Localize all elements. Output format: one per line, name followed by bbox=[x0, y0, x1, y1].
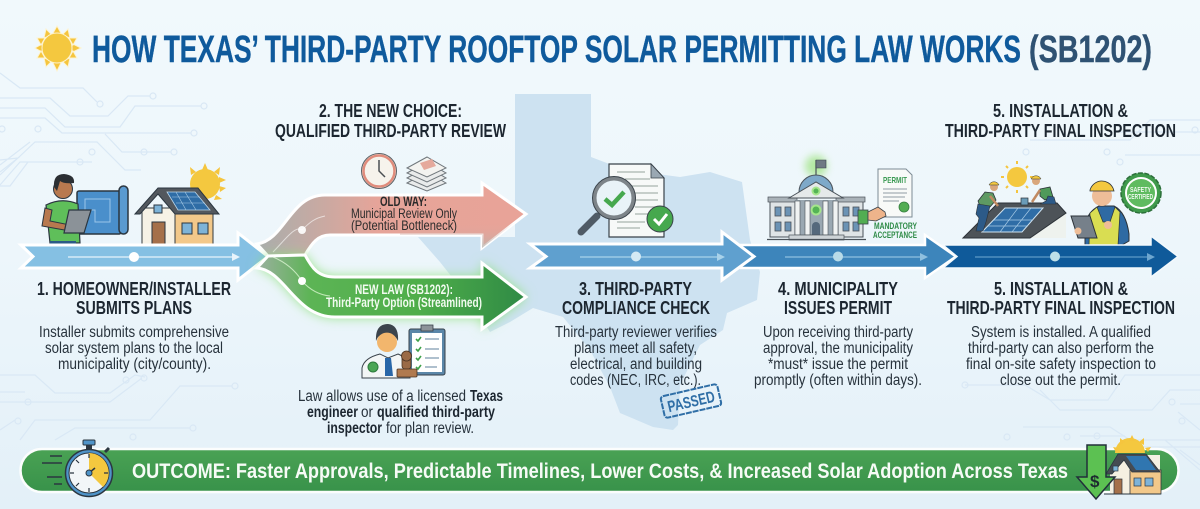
heading: step 4 bbox=[778, 279, 898, 318]
text: step 5 description: final on-site safety inspection to bbox=[966, 356, 1156, 373]
panel: step 4 bbox=[754, 155, 922, 389]
icon: sun behind house bbox=[1113, 435, 1151, 453]
text: step 2 description bbox=[298, 388, 503, 437]
arrow: step 1 bbox=[21, 233, 268, 280]
text: new law label bbox=[326, 282, 482, 310]
arrow: old way bbox=[257, 183, 526, 256]
icon: cost-down arrow with dollar: $ bbox=[1090, 472, 1100, 491]
text: mandatory acceptance: MANDATORY bbox=[874, 221, 917, 231]
text: step 5 description: third-party can also perform the bbox=[968, 340, 1154, 357]
background: circuit traces left bbox=[0, 73, 238, 450]
arrow: step 5 bbox=[943, 236, 1178, 277]
text: step 2 description: engineer bbox=[307, 404, 358, 421]
text: step 4 description: promptly (often within days). bbox=[754, 372, 922, 389]
text: step 5 description: close out the permit. bbox=[1000, 372, 1121, 389]
text: step 5 description bbox=[966, 324, 1156, 389]
icon: house with solar bbox=[1104, 454, 1161, 494]
text: step 3 description: electrical, and building bbox=[570, 356, 702, 373]
stamp: passed: PASSED bbox=[666, 389, 717, 416]
icon: document under magnifier bbox=[581, 164, 673, 237]
text: old way label: Municipal Review Only bbox=[351, 206, 457, 221]
icon: safety certified badge: CERTIFIED bbox=[1128, 194, 1153, 201]
icon: municipal building bbox=[767, 155, 866, 240]
arrow: step 4 bbox=[741, 235, 956, 278]
panel: step 5 bbox=[943, 101, 1178, 389]
text: step 2 description: Law allows use of a licensed bbox=[298, 388, 466, 405]
text: new law label: NEW LAW (SB1202): bbox=[355, 282, 453, 297]
text: step 3 description: Third-party reviewer verifies bbox=[555, 324, 717, 341]
text: step 1 description: Installer submits comprehensive bbox=[39, 324, 229, 341]
text: step 3 description: codes (NEC, IRC, etc.). bbox=[570, 372, 701, 389]
icon: workers installing roof panels bbox=[963, 161, 1066, 238]
icon: paper stack bbox=[407, 157, 446, 191]
icon: permit document held by hand bbox=[858, 169, 912, 224]
icon: safety certified badge: SAFETY bbox=[1130, 185, 1151, 194]
text: old way label: (Potential Bottleneck) bbox=[351, 218, 457, 233]
text: step 2 description: qualified third-party bbox=[377, 404, 495, 421]
icon: wall clock bbox=[362, 154, 396, 188]
heading: step 5 top bbox=[945, 101, 1176, 141]
heading: step 3: 3. THIRD-PARTY bbox=[579, 279, 692, 299]
title bbox=[35, 26, 1152, 71]
text: step 2 description: Texas bbox=[470, 388, 503, 405]
heading: step 1 bbox=[37, 279, 231, 318]
icon: safety certified badge bbox=[1121, 173, 1161, 213]
text: step 1 description: municipality (city/county). bbox=[58, 356, 211, 373]
arrow glow: new law bbox=[257, 255, 526, 329]
worker: right installer bbox=[1031, 176, 1056, 204]
text: step 4 description: Upon receiving third-party bbox=[763, 324, 913, 341]
text: mandatory acceptance: ACCEPTANCE bbox=[873, 230, 917, 240]
heading: step 2: 2. THE NEW CHOICE: bbox=[319, 101, 462, 121]
panel: step 3 bbox=[530, 164, 956, 418]
icon: cost-down arrow with dollar bbox=[1077, 445, 1115, 499]
icon: permit document held by hand: PERMIT bbox=[883, 175, 908, 185]
heading: step 1: SUBMITS PLANS bbox=[76, 298, 192, 318]
icon: house with solar panels and sun bbox=[135, 163, 226, 244]
heading: step 4: 4. MUNICIPALITY bbox=[778, 279, 898, 299]
heading: step 5 top: 5. INSTALLATION & bbox=[993, 101, 1128, 121]
text: step 1 description bbox=[39, 324, 229, 373]
text: old way label bbox=[351, 194, 457, 233]
panel: outcome banner bbox=[20, 435, 1178, 499]
heading: step 4: ISSUES PERMIT bbox=[784, 298, 892, 318]
heading: step 5 bottom bbox=[947, 279, 1175, 318]
icon: homeowner with blueprint bbox=[42, 174, 128, 245]
text: old way label: OLD WAY: bbox=[380, 194, 427, 209]
heading: step 2: QUALIFIED THIRD-PARTY REVIEW bbox=[275, 121, 506, 141]
heading: step 3: COMPLIANCE CHECK bbox=[562, 298, 710, 318]
worker: left installer bbox=[976, 182, 999, 231]
text: step 4 description: approval, the municipality bbox=[763, 340, 913, 357]
icon: inspector with tablet bbox=[1071, 181, 1129, 245]
text: step 2 description: for plan review. bbox=[386, 420, 474, 437]
text: step 4 description: *must* issue the permit bbox=[768, 356, 909, 373]
text: step 3 description bbox=[555, 324, 717, 389]
heading: step 1: 1. HOMEOWNER/INSTALLER bbox=[37, 279, 231, 299]
heading: step 2 bbox=[275, 101, 506, 141]
icon: engineer with clipboard and stamp bbox=[362, 324, 445, 378]
icon: stopwatch bbox=[42, 440, 112, 496]
text: step 2 description: inspector bbox=[327, 420, 382, 437]
arrow: step 3 bbox=[530, 232, 754, 280]
text: step 3 description: plans meet all safety, bbox=[574, 340, 697, 357]
text: step 5 description: System is installed. A qualified bbox=[971, 324, 1151, 341]
panel: step 2 bbox=[257, 101, 526, 437]
text: mandatory acceptance bbox=[873, 221, 917, 240]
heading: step 5 bottom: 5. INSTALLATION & bbox=[994, 279, 1128, 299]
title bill number: (SB1202) bbox=[1029, 29, 1152, 71]
panel: step 1 bbox=[21, 163, 268, 373]
text: step 1 description: solar system plans to the local bbox=[45, 340, 223, 357]
text: new law label: Third-Party Option (Streamlined) bbox=[326, 295, 482, 310]
text: step 2 description: or bbox=[361, 404, 373, 421]
heading: step 3 bbox=[562, 279, 710, 318]
background: circuit traces right bbox=[962, 120, 1200, 470]
text: step 4 description bbox=[754, 324, 922, 389]
outcome bar bbox=[20, 449, 1178, 492]
arrow: new law bbox=[257, 255, 526, 329]
icon: title sun bbox=[35, 26, 81, 71]
background: Texas silhouette bbox=[418, 94, 760, 430]
